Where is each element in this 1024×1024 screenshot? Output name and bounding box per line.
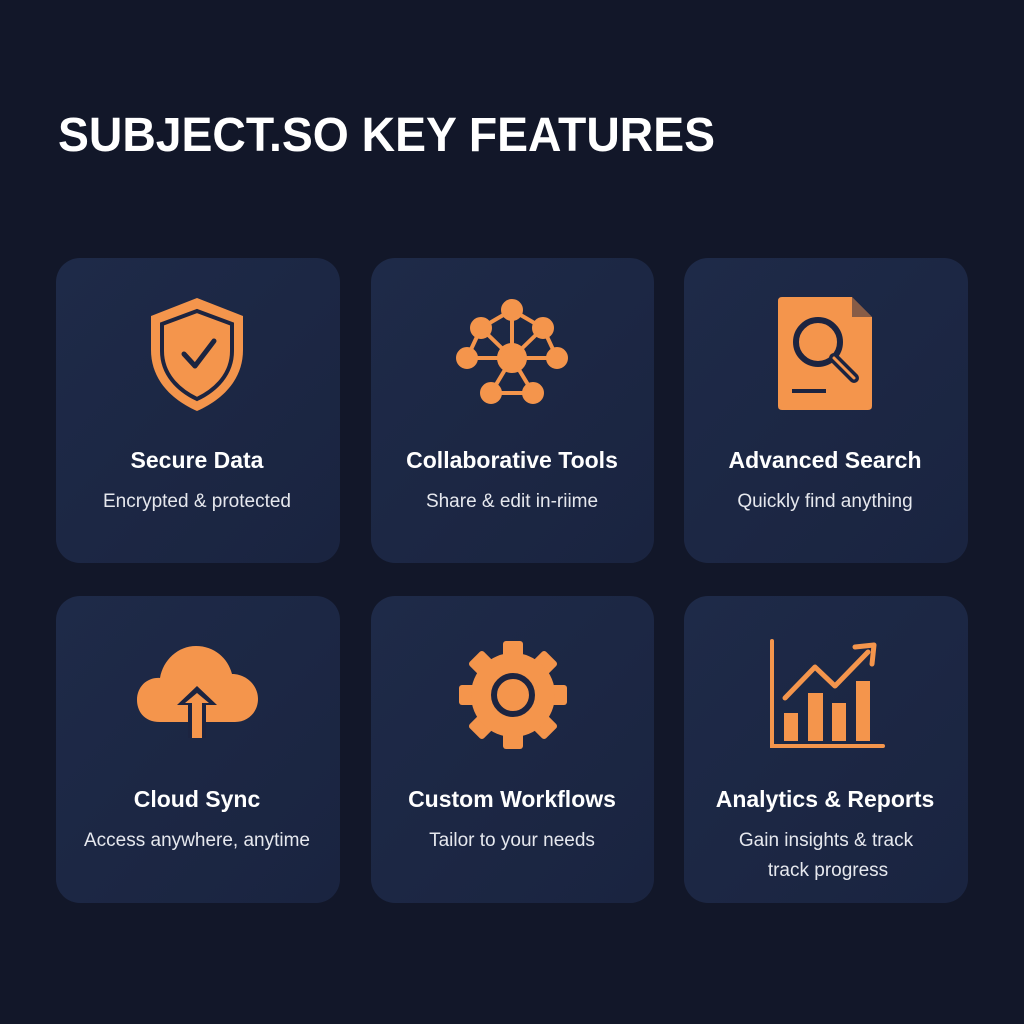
icon: shield: [151, 298, 243, 411]
icon: document search: [778, 297, 872, 410]
text: Encrypted & protected: [103, 491, 291, 512]
heading: Cloud Sync: [134, 786, 260, 812]
icon: network: [458, 301, 566, 402]
icon: gear: [459, 641, 567, 749]
text: Quickly find anything: [737, 491, 913, 512]
title: SUBJECT.SO KEY FEATURES: [58, 109, 715, 162]
text: Gain insights & track: [739, 830, 914, 851]
text line 2: track progress: [768, 860, 888, 881]
panel: secure data: [56, 258, 340, 563]
heading: Collaborative Tools: [406, 447, 618, 473]
icon: chart: [772, 641, 883, 746]
heading: Advanced Search: [728, 447, 922, 473]
heading: Analytics & Reports: [716, 786, 934, 812]
text: Access anywhere, anytime: [84, 830, 310, 851]
icon: cloud upload: [137, 646, 258, 738]
text: Tailor to your needs: [429, 830, 595, 851]
heading: Custom Workflows: [408, 786, 616, 812]
heading: Secure Data: [131, 447, 264, 473]
text: Share & edit in-riime: [426, 491, 598, 512]
panel: custom workflows: [371, 596, 654, 903]
panel: collaborative tools: [371, 258, 654, 563]
panel: advanced search: [684, 258, 968, 563]
panel: analytics: [684, 596, 968, 903]
panel: cloud sync: [56, 596, 340, 903]
